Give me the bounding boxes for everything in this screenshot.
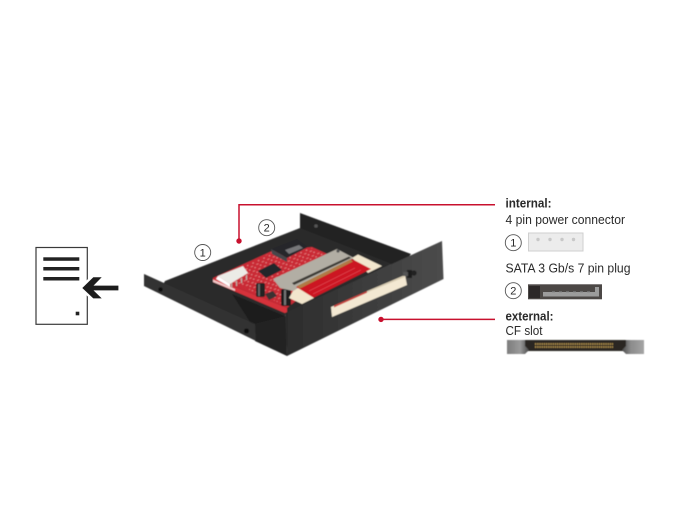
cream rail left (289, 288, 314, 304)
metal frame (273, 249, 354, 291)
CF slot opening (331, 275, 407, 317)
left side flange (144, 274, 256, 341)
red CF interior (296, 259, 371, 298)
icon: drive bay with arrow (36, 248, 120, 324)
CF card slot assembly (273, 249, 382, 304)
flange screws (158, 287, 249, 334)
board component texture (222, 248, 340, 306)
icon: SATA plug (528, 284, 602, 299)
front plate screw (403, 270, 417, 278)
rear screw (314, 224, 318, 228)
small component (265, 291, 277, 300)
product photo: drive bracket with CF card reader (144, 213, 444, 356)
circuit board (213, 239, 345, 314)
heading: external: external: (506, 310, 554, 324)
capacitor right (281, 289, 291, 306)
side edge below flange (254, 316, 287, 356)
label: 4 pin power connector: 4 pin power connector (506, 213, 625, 227)
label: CF slot: CF slot (506, 324, 543, 338)
floor shadow (232, 294, 285, 340)
4 pin power connector on board (218, 266, 248, 284)
callout number 2 on photo: 2 (264, 223, 270, 235)
gold connector pins (297, 260, 353, 288)
callout number 2 on photo (259, 220, 275, 236)
chip (258, 263, 282, 278)
SATA connector on board (271, 239, 308, 262)
icon: 4 pin power connector (528, 233, 583, 251)
callout number 1 on photo (195, 244, 211, 260)
callout number 1 in legend (505, 235, 521, 251)
callout number 1 on photo: 1 (200, 248, 206, 260)
interior highlights (309, 268, 361, 294)
callout number 1 in legend: 1 (510, 238, 516, 250)
arrow: insertion direction (79, 275, 120, 300)
leader: internal (236, 205, 495, 244)
label: SATA 3 Gb/s 7 pin plug: SATA 3 Gb/s 7 pin plug (506, 262, 631, 276)
front plate (285, 241, 444, 356)
icon: bay outline (36, 248, 87, 324)
heading: internal: internal: (506, 196, 552, 210)
capacitor left (256, 283, 265, 297)
callout number 2 in legend (505, 283, 521, 299)
icon: bay lines (43, 257, 79, 280)
bracket floor (160, 228, 392, 345)
callout number 2 in legend: 2 (510, 286, 516, 298)
bracket back flange (300, 213, 411, 268)
connector pins (231, 275, 247, 288)
leader: external (378, 317, 495, 322)
icon: CF slot connector (507, 340, 644, 354)
icon: bay indicator (76, 312, 79, 315)
cream rail right (352, 254, 382, 273)
